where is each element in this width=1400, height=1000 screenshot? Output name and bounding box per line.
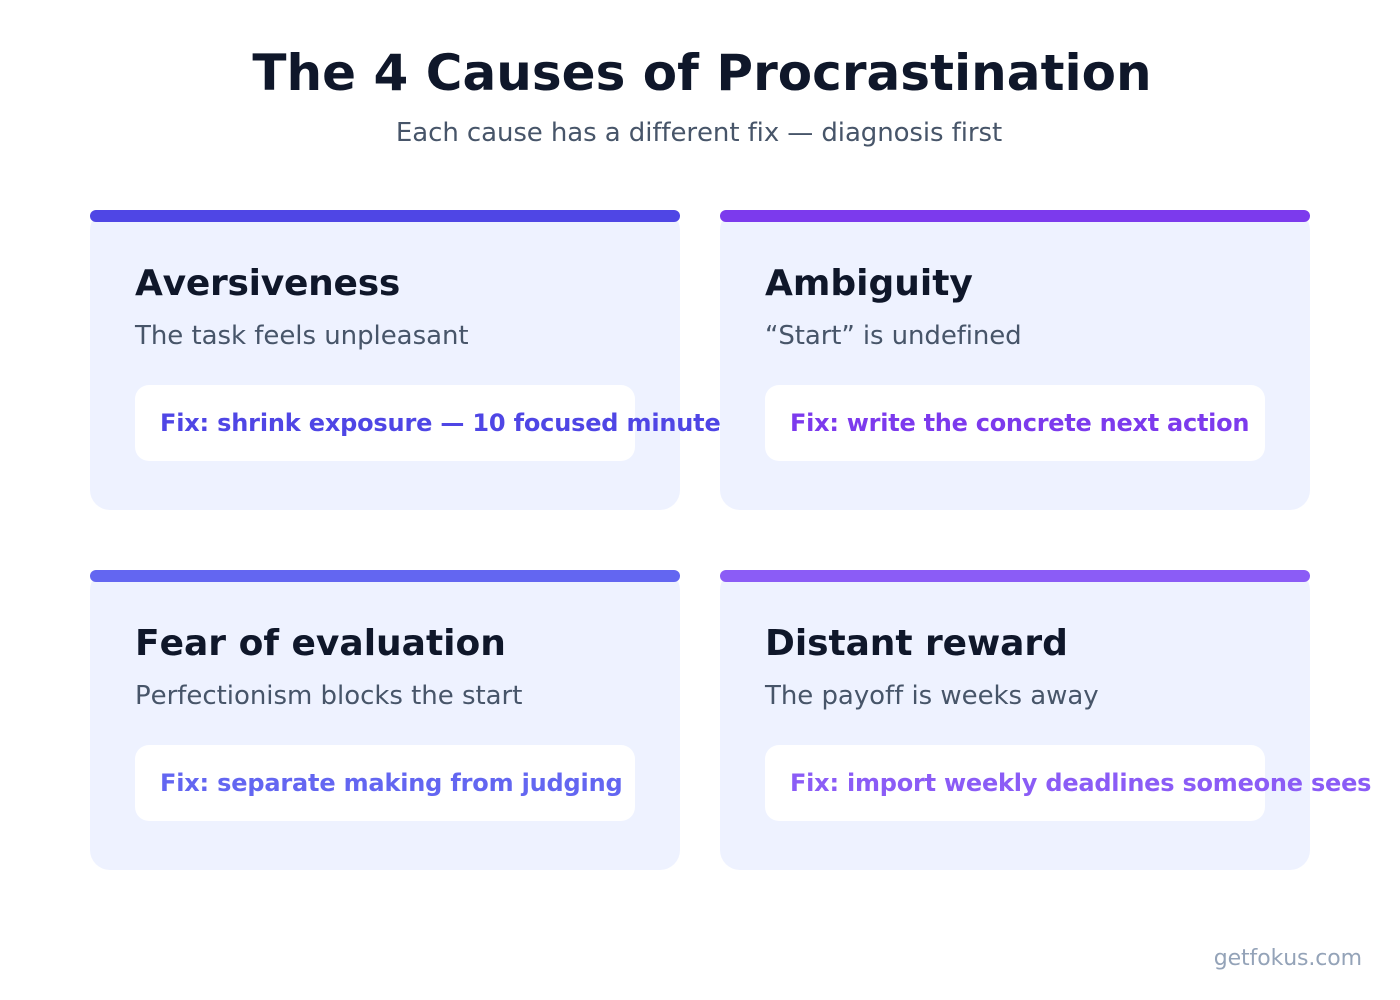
panel: Fear of evaluation bbox=[90, 570, 680, 870]
heading: Ambiguity: Ambiguity bbox=[765, 263, 973, 304]
panel: Aversiveness bbox=[90, 210, 680, 510]
footer: source: getfokus.com bbox=[1214, 946, 1362, 971]
title: The 4 Causes of Procrastination bbox=[252, 44, 1152, 102]
fix box: Aversiveness: Fix: shrink exposure — 10 focused minutes bbox=[160, 409, 735, 437]
fix box: Fear of evaluation bbox=[135, 745, 635, 821]
description: Distant reward: The payoff is weeks away bbox=[765, 681, 1099, 711]
fix box: Ambiguity bbox=[765, 385, 1265, 461]
description: Ambiguity: “Start” is undefined bbox=[765, 321, 1022, 351]
fix box: Aversiveness bbox=[135, 385, 635, 461]
heading: Fear of evaluation: Fear of evaluation bbox=[135, 623, 506, 664]
description: Aversiveness: The task feels unpleasant bbox=[135, 321, 469, 351]
fix box: Ambiguity: Fix: write the concrete next action bbox=[790, 409, 1249, 437]
description: Fear of evaluation: Perfectionism blocks the start bbox=[135, 681, 522, 711]
panel: Distant reward bbox=[720, 570, 1310, 870]
fix box: Distant reward: Fix: import weekly deadlines someone sees bbox=[790, 769, 1371, 797]
fix box: Fear of evaluation: Fix: separate making from judging bbox=[160, 769, 622, 797]
fix box: Distant reward bbox=[765, 745, 1265, 821]
panel: Ambiguity bbox=[720, 210, 1310, 510]
heading: Distant reward: Distant reward bbox=[765, 623, 1068, 664]
subtitle: Each cause has a different fix — diagnosis first bbox=[396, 118, 1002, 148]
heading: Aversiveness: Aversiveness bbox=[135, 263, 400, 304]
